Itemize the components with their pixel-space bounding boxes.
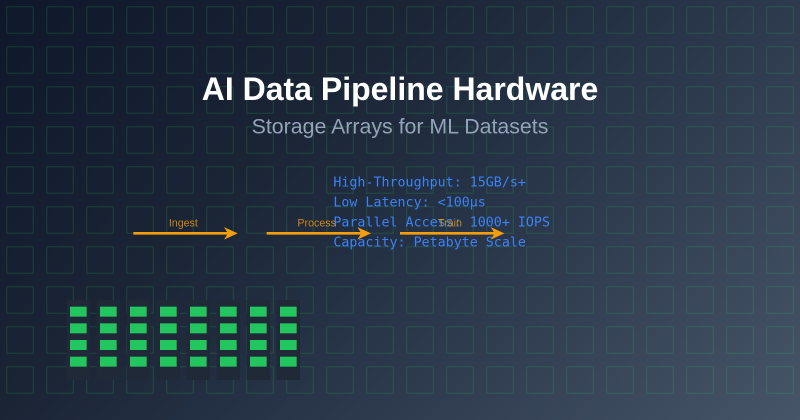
specifications text block: Capacity: Petabyte Scale [333, 236, 526, 251]
specifications text block [333, 176, 550, 251]
rack 5 [187, 300, 210, 380]
pipeline flow arrows [133, 218, 504, 240]
rack 7 [247, 300, 270, 380]
arrow: ingest [133, 218, 238, 240]
title: AI Data Pipeline Hardware [202, 71, 598, 107]
subtitle: Storage Arrays for ML Datasets [252, 114, 548, 138]
specifications text block: Parallel Access: 1000+ IOPS [333, 216, 550, 231]
rack 2 [97, 300, 120, 380]
arrow: train: Train [438, 218, 462, 230]
specifications text block: High-Throughput: 15GB/s+ [333, 176, 526, 191]
rack 3 [127, 300, 150, 380]
rack 8 [277, 300, 300, 380]
arrow: ingest: Ingest [169, 218, 198, 230]
arrow: process: Process [297, 218, 336, 230]
rack 6 [217, 300, 240, 380]
rack 4 [157, 300, 180, 380]
rack 1 [67, 300, 90, 380]
specifications text block: Low Latency: <100µs [333, 196, 486, 211]
arrow: process [267, 218, 371, 240]
storage array racks [67, 300, 300, 380]
arrow: train [400, 218, 504, 240]
